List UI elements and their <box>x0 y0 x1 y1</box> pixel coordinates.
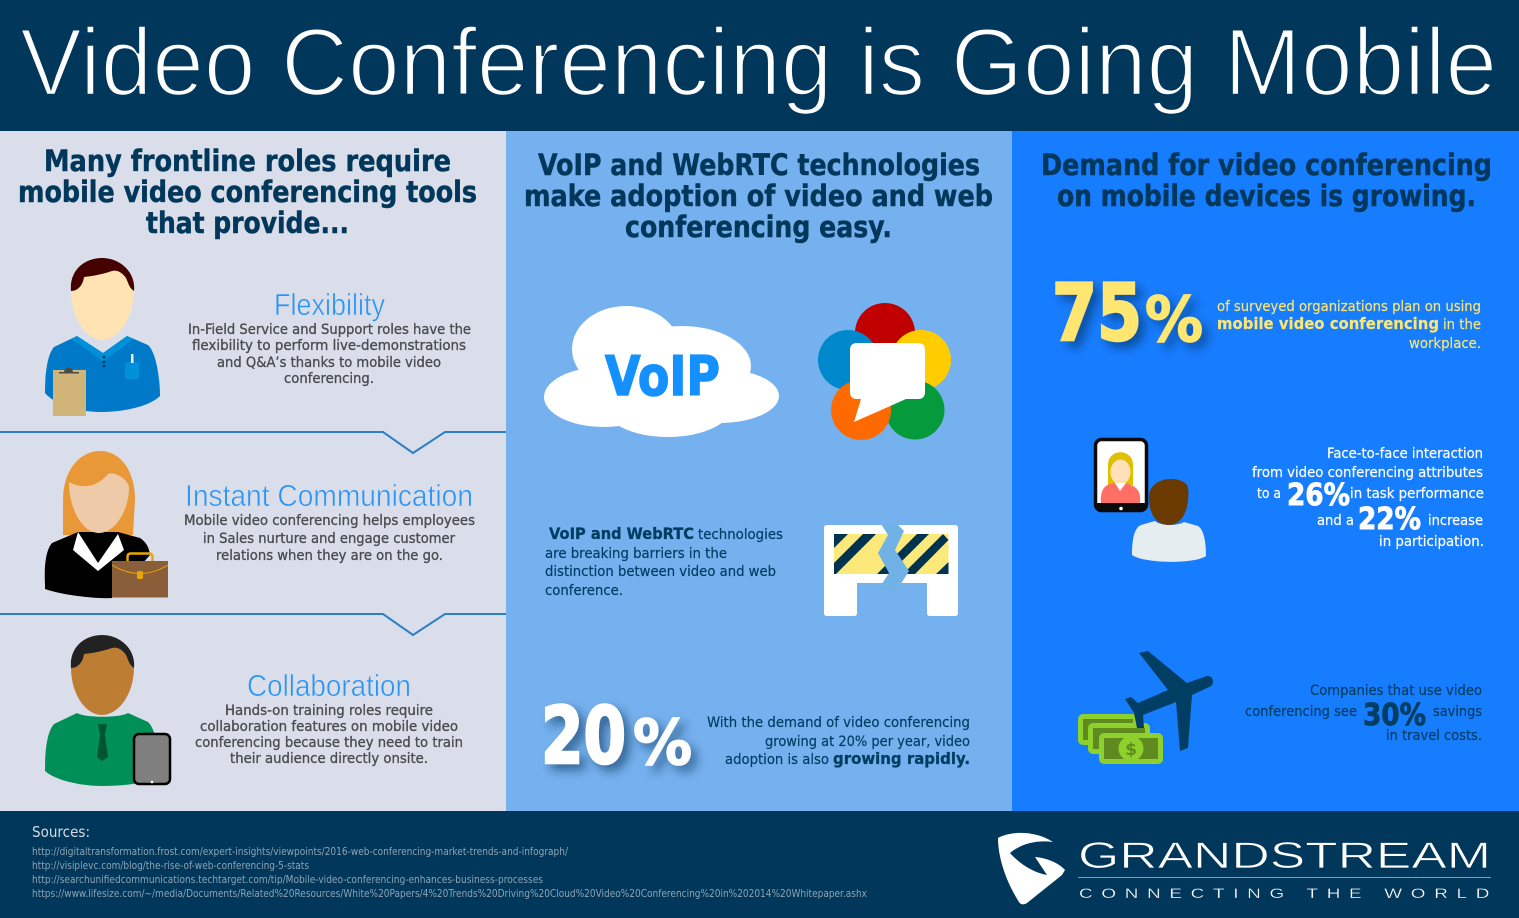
text block: travel savings <box>1245 683 1482 744</box>
heading: VoIP and WebRTC: make adoption of video and web <box>524 179 993 213</box>
panel: growing demand <box>1012 131 1519 811</box>
text block: collaboration: Hands-on training roles require <box>225 703 433 719</box>
text block: growing 20 percent: growing at 20% per year, video <box>765 734 970 750</box>
text block: task performance <box>1252 446 1484 550</box>
subheading: flexibility: Flexibility <box>274 287 385 322</box>
text block: breaking barriers: technologies <box>698 527 783 543</box>
text block: surveyed organizations: mobile video conferencing <box>1217 314 1439 333</box>
icon: money bills: $ <box>1125 740 1137 760</box>
text block: collaboration: their audience directly onsite. <box>230 751 428 767</box>
text block: breaking barriers: distinction between video and web <box>545 564 776 580</box>
text block: source links: https://www.lifesize.com/~/media/Documents/Related%20Resources/White%20Papers/4%20Trends%20Driving%20Cloud%20Video%20Conferencing%20in%202014%20Whitepaper.ashx <box>32 888 867 900</box>
text block: travel savings: in travel costs. <box>1386 728 1482 744</box>
text block: growing 20 percent: growing rapidly. <box>833 749 970 768</box>
text block: travel savings: conferencing see <box>1245 704 1357 720</box>
text block: surveyed organizations: in the <box>1443 317 1481 333</box>
text block: travel savings: savings <box>1433 704 1482 720</box>
text block: growing 20 percent: With the demand of video conferencing <box>707 715 970 731</box>
heading: VoIP and WebRTC: VoIP and WebRTC technologies <box>538 148 980 182</box>
heading: frontline roles: mobile video conferencing tools <box>18 175 477 209</box>
stat: 26 percent: 26% <box>1287 478 1350 513</box>
stat: 22 percent: 22% <box>1358 502 1421 537</box>
text block: source links <box>32 846 867 900</box>
heading: frontline roles: that provide... <box>146 206 349 240</box>
subheading: collaboration: Collaboration <box>247 668 411 703</box>
icon: trainer <box>45 635 170 786</box>
logo: Grandstream <box>998 833 1491 904</box>
subheading: instant communication: Instant Communication <box>185 478 473 513</box>
text block: flexibility: In-Field Service and Support roles have the <box>188 322 471 338</box>
panel: footer <box>0 811 1519 918</box>
icon: field service worker <box>45 258 160 416</box>
text block: task performance: to a <box>1257 486 1281 502</box>
panel: header <box>0 0 1519 131</box>
text block: surveyed organizations <box>1217 299 1481 352</box>
panel: VoIP and WebRTC <box>506 131 1012 811</box>
text block: task performance: in participation. <box>1379 534 1484 550</box>
text block: collaboration: conferencing because they need to train <box>195 735 463 751</box>
stat: 20 percent: 20 <box>541 692 626 782</box>
panel: frontline roles <box>0 131 506 811</box>
icon: person on tablet video call <box>1096 440 1206 562</box>
stat: 30 percent: 30% <box>1363 698 1426 733</box>
text block: instant communication <box>184 513 475 564</box>
text block: collaboration: collaboration features on mobile video <box>200 719 458 735</box>
text block: travel savings: Companies that use video <box>1310 683 1482 699</box>
text block: source links: http://digitaltransformation.frost.com/expert-insights/viewpoints/2016-web-conferencing-market-trends-and-infograph/ <box>32 846 568 858</box>
text block: task performance: in task performance <box>1350 486 1484 502</box>
title: Video Conferencing is Going Mobile <box>20 9 1497 116</box>
icon: WebRTC logo <box>818 303 951 440</box>
heading: growing demand <box>1041 148 1492 213</box>
text block: source links: http://searchunifiedcommunications.techtarget.com/tip/Mobile-video-conferencing-enhances-business-processes <box>32 874 543 886</box>
text block: instant communication: relations when they are on the go. <box>216 548 443 564</box>
text block: flexibility <box>188 322 471 387</box>
logo: Grandstream: GRANDSTREAM <box>1078 835 1491 876</box>
icon: Grandstream swoosh <box>998 833 1065 904</box>
heading: frontline roles <box>18 144 477 240</box>
text block: flexibility: and Q&A’s thanks to mobile video <box>217 355 441 371</box>
text block: task performance: and a <box>1317 513 1354 529</box>
text block: breaking barriers <box>545 524 783 599</box>
text block: growing 20 percent: adoption is also <box>725 752 829 768</box>
heading: VoIP and WebRTC: conferencing easy. <box>625 210 892 244</box>
icon: money bills <box>1078 714 1163 764</box>
icon: sales woman <box>45 451 168 598</box>
icon: broken barrier <box>824 524 958 616</box>
text block: surveyed organizations: workplace. <box>1409 336 1481 352</box>
stat: 20 percent: % <box>633 706 692 779</box>
text block: task performance: increase <box>1428 513 1483 529</box>
text block: growing 20 percent <box>707 715 970 768</box>
icon: airplane <box>1125 651 1213 751</box>
text block: surveyed organizations: of surveyed organizations plan on using <box>1217 299 1481 315</box>
text block: source links: http://visiplevc.com/blog/the-rise-of-web-conferencing-5-stats <box>32 860 309 872</box>
stat: 75 percent: 75 <box>1052 269 1142 359</box>
text block: task performance: from video conferencing attributes <box>1252 465 1483 481</box>
text block: instant communication: in Sales nurture and engage customer <box>203 531 455 547</box>
logo: Grandstream: CONNECTING THE WORLD <box>1079 885 1489 901</box>
heading: VoIP and WebRTC <box>524 148 993 244</box>
text block: flexibility: flexibility to perform live-demonstrations <box>192 338 466 354</box>
text block: flexibility: conferencing. <box>284 371 374 387</box>
text block: breaking barriers: VoIP and WebRTC <box>549 524 694 543</box>
text block: task performance: Face-to-face interaction <box>1327 446 1483 462</box>
icon: VoIP cloud: VoIP <box>605 345 720 408</box>
text block: instant communication: Mobile video conferencing helps employees <box>184 513 475 529</box>
text block: collaboration <box>195 703 463 767</box>
stat: 75 percent: % <box>1145 283 1203 356</box>
text block: breaking barriers: conference. <box>545 583 623 599</box>
text block: breaking barriers: are breaking barriers in the <box>545 546 727 562</box>
sources heading: Sources: <box>32 823 90 841</box>
icon: VoIP cloud <box>544 306 779 437</box>
heading: frontline roles: Many frontline roles require <box>44 144 451 178</box>
